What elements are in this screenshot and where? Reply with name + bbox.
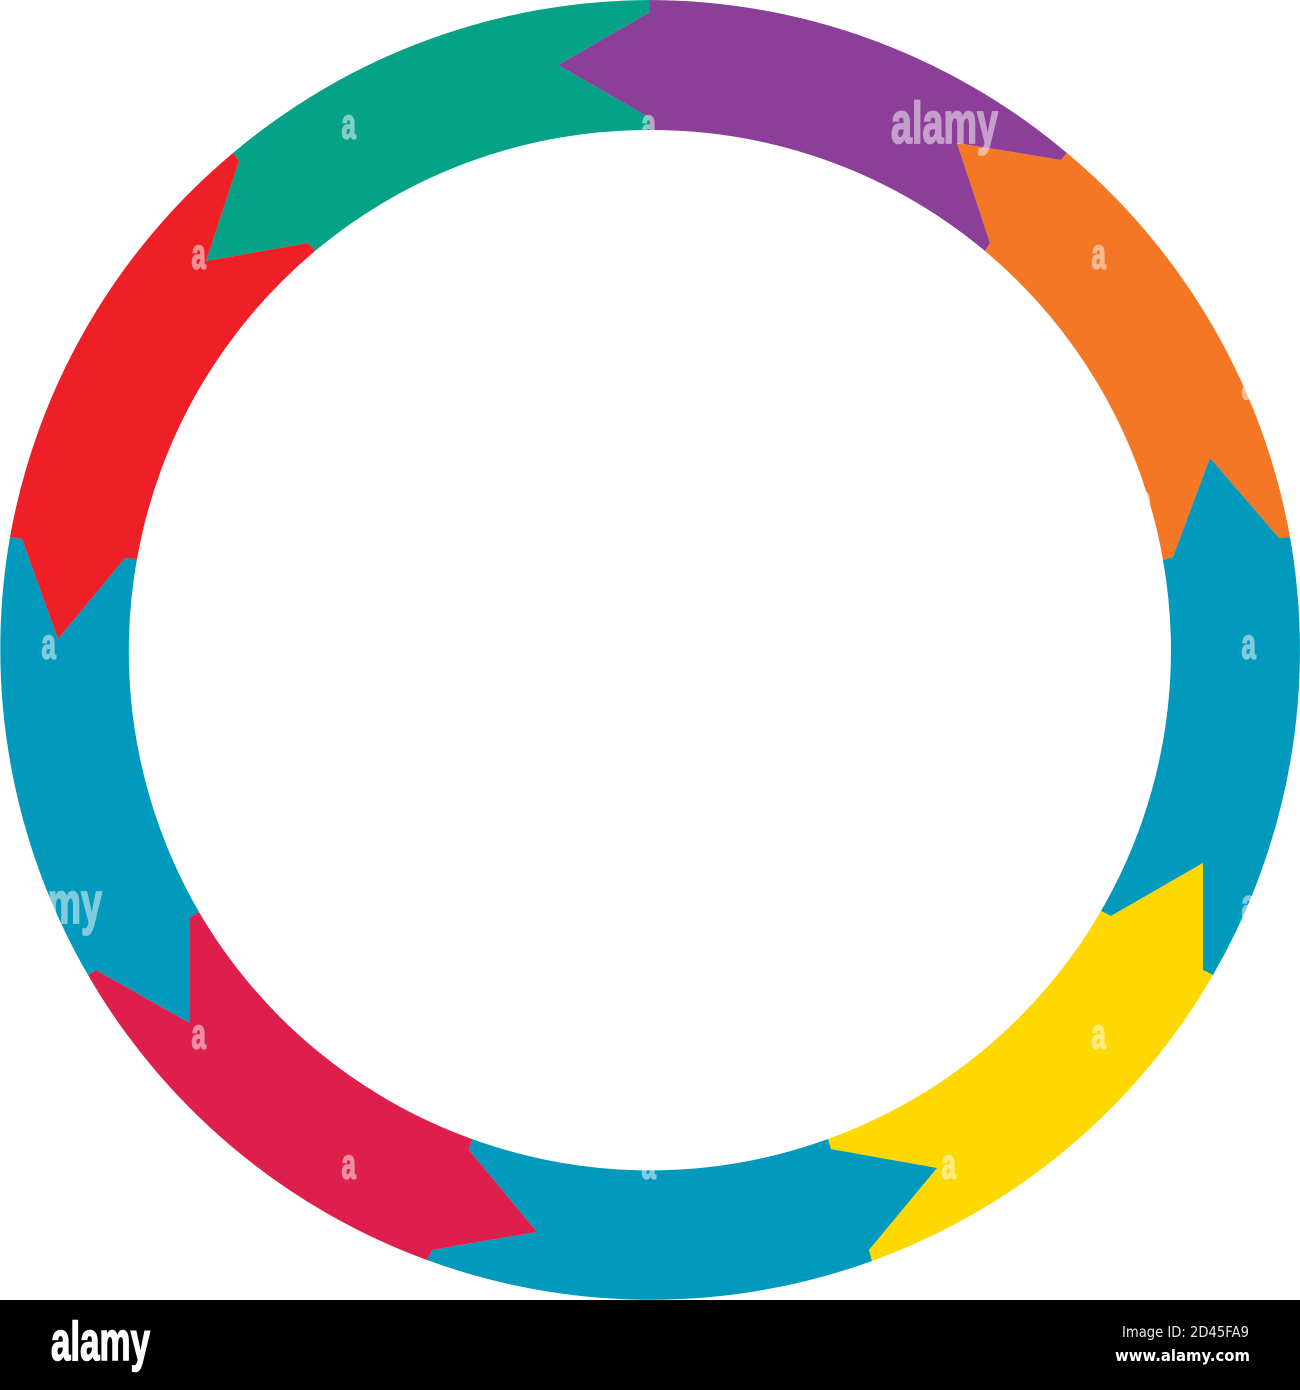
footer bar (0, 1300, 1300, 1390)
watermark marks over ring: a (342, 1140, 356, 1188)
arrow: orange segment (957, 143, 1290, 560)
arrow: bottom blue segment (427, 1139, 937, 1300)
watermark marks over ring: a (192, 230, 206, 278)
watermark marks over ring: a (642, 1140, 656, 1188)
arrow: left blue segment (0, 537, 199, 1023)
arrow: yellow segment (828, 863, 1213, 1261)
watermark marks over ring: a (1242, 360, 1256, 409)
watermark marks over ring: a (1137, 476, 1152, 525)
watermark marks over ring: a (942, 1140, 956, 1188)
watermark marks over ring: a (1092, 230, 1106, 278)
arrow: right blue segment (1101, 458, 1300, 975)
watermark marks over ring: a (342, 100, 356, 148)
website: www.alamy.com (1115, 1346, 1250, 1365)
arrow: crimson segment (88, 912, 537, 1260)
arrow: red segment (10, 153, 315, 639)
arrow: purple segment (558, 0, 1067, 251)
watermark marks over ring: a (192, 1010, 206, 1058)
watermark marks over ring: a (1092, 1010, 1106, 1058)
arrow: green segment (206, 0, 650, 261)
watermark marks over ring: a (1242, 620, 1256, 668)
watermark marks over ring: alamy (891, 91, 998, 156)
watermark marks over ring: a (1242, 880, 1256, 929)
watermark marks over ring: a (642, 100, 656, 148)
image id: Image ID: 2D45FA9 (1122, 1323, 1249, 1341)
watermark marks over ring: a (42, 620, 56, 668)
watermark marks over ring (0, 91, 1256, 1188)
footer logo: alamy (51, 1310, 150, 1372)
